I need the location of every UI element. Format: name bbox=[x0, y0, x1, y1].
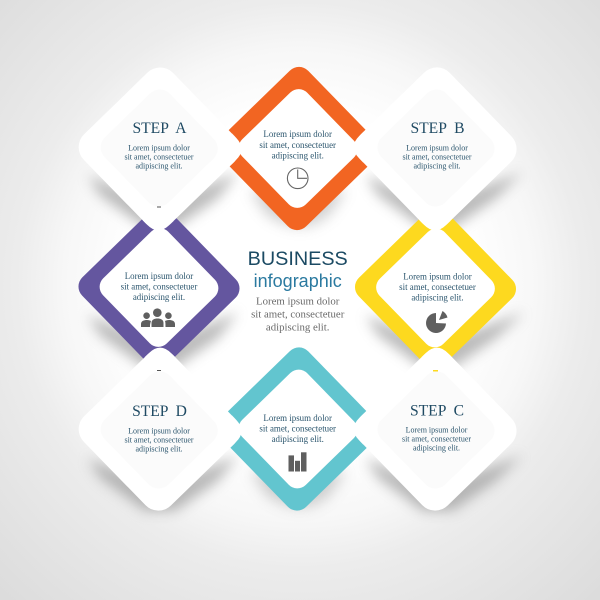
text: step D: Lorem ipsum dolor bbox=[128, 426, 190, 436]
panel: step B bbox=[348, 60, 524, 236]
text: step A: sit amet, consectetuer bbox=[124, 152, 194, 162]
text: center description: sit amet, consectetuer bbox=[251, 308, 345, 320]
text: step A: adipiscing elit. bbox=[135, 162, 183, 170]
drop shadows bbox=[88, 172, 524, 511]
heading: step A: STEP A bbox=[132, 120, 187, 137]
icon: bar chart bbox=[288, 452, 306, 472]
panel: step C bbox=[348, 342, 524, 518]
text: step D: sit amet, consectetuer bbox=[124, 436, 194, 444]
text: purple panel: Lorem ipsum dolor bbox=[125, 271, 193, 281]
panel: orange diamond bbox=[211, 62, 385, 235]
text: purple panel: adipiscing elit. bbox=[133, 292, 185, 302]
subtitle: infographic bbox=[254, 271, 342, 291]
text: orange panel: sit amet, consectetuer bbox=[259, 140, 336, 150]
text: center description: Lorem ipsum dolor bbox=[256, 296, 340, 308]
text: step A: Lorem ipsum dolor bbox=[128, 144, 190, 152]
panel: yellow diamond bbox=[350, 202, 521, 374]
text: step C: Lorem ipsum dolor bbox=[406, 426, 468, 434]
panel: step A bbox=[71, 60, 247, 236]
text: purple panel: sit amet, consectetuer bbox=[121, 282, 197, 292]
text: step C: sit amet, consectetuer bbox=[402, 434, 471, 444]
icon: pie chart bbox=[426, 311, 448, 333]
title bbox=[248, 248, 348, 291]
text: yellow panel: sit amet, consectetuer bbox=[399, 282, 476, 292]
heading: step D: STEP D bbox=[132, 403, 187, 420]
text: step B: Lorem ipsum dolor bbox=[406, 144, 468, 152]
text: yellow panel: Lorem ipsum dolor bbox=[403, 272, 472, 282]
text: step B: sit amet, consectetuer bbox=[402, 152, 472, 162]
heading: step B: STEP B bbox=[410, 120, 465, 137]
text: yellow panel: adipiscing elit. bbox=[411, 292, 464, 302]
icon: clock bbox=[287, 168, 308, 189]
title: BUSINESS bbox=[248, 248, 348, 270]
soft shadows below orange and teal bbox=[250, 190, 346, 507]
text: teal panel: Lorem ipsum dolor bbox=[263, 413, 332, 423]
text: center description: adipiscing elit. bbox=[266, 322, 329, 334]
text: step B: adipiscing elit. bbox=[413, 162, 461, 170]
text: orange panel: adipiscing elit. bbox=[272, 150, 324, 160]
panel: purple diamond bbox=[73, 202, 245, 373]
text: teal panel: adipiscing elit. bbox=[272, 434, 324, 444]
panel: teal diamond bbox=[211, 342, 385, 516]
panel: step D bbox=[71, 342, 247, 518]
text: step D: adipiscing elit. bbox=[135, 444, 183, 454]
icon: people bbox=[141, 308, 175, 327]
text: teal panel: sit amet, consectetuer bbox=[259, 424, 336, 434]
text: step C: adipiscing elit. bbox=[413, 444, 460, 452]
heading: step C: STEP C bbox=[410, 402, 464, 420]
text: orange panel: Lorem ipsum dolor bbox=[263, 129, 332, 139]
